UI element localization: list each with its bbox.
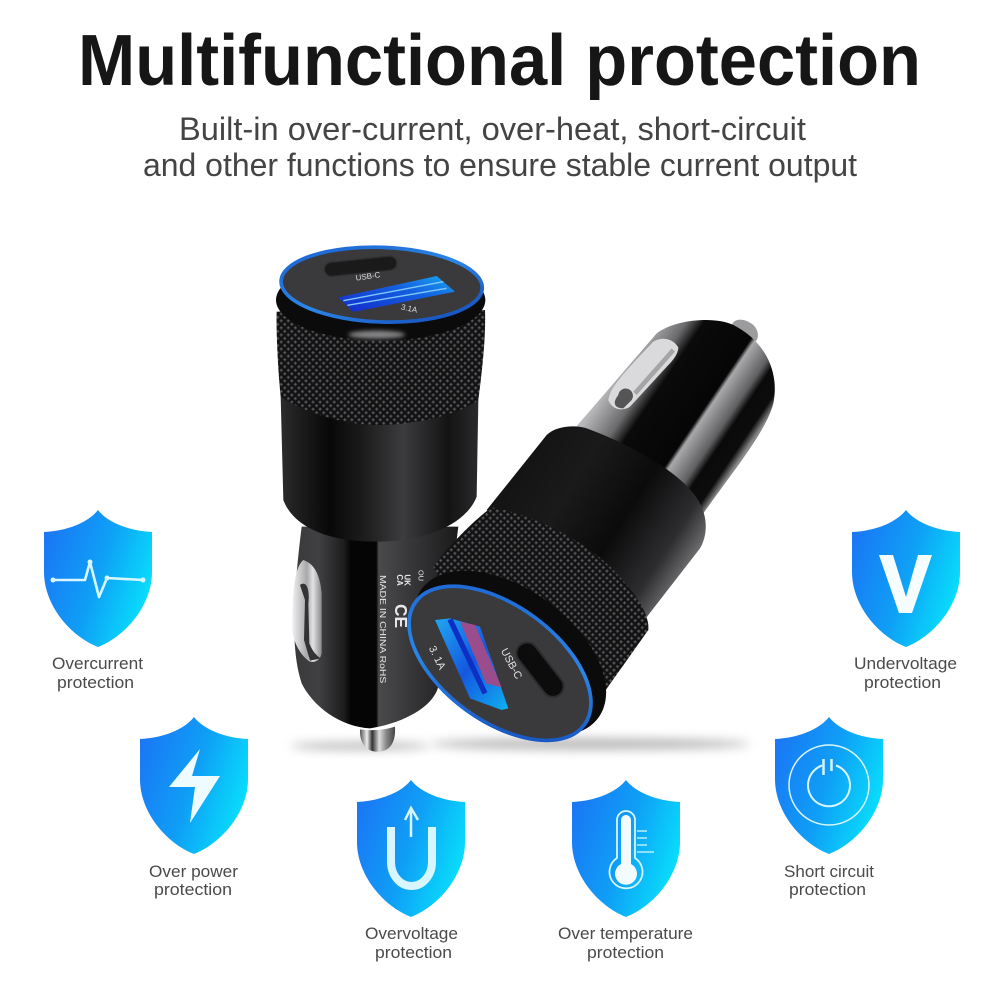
shield: undervoltage — [852, 510, 960, 647]
knurled ring — [277, 310, 485, 425]
plug markings: CA — [395, 574, 404, 586]
label: over power: Over power — [149, 862, 238, 881]
label: over power — [149, 862, 238, 899]
blue ring — [280, 244, 484, 325]
shield: over power — [140, 717, 248, 854]
USB-C port — [324, 256, 397, 277]
body sleeve — [487, 426, 706, 630]
label: over temperature — [558, 924, 693, 962]
port labels: USB-C — [498, 646, 524, 682]
blue ring — [382, 555, 618, 771]
label: short circuit: Short circuit — [784, 862, 874, 881]
power icon — [789, 745, 869, 825]
title: Multifunctional protection — [78, 21, 921, 101]
plug markings: OU — [416, 570, 425, 581]
label: short circuit — [784, 862, 874, 899]
shield: overvoltage — [357, 780, 465, 917]
tilted car charger: 3. 1A — [426, 644, 448, 672]
label: over temperature: protection — [587, 943, 664, 962]
USB-A port — [338, 276, 455, 312]
metal rim — [384, 537, 636, 769]
subtitle: and other functions to ensure stable current output — [143, 147, 857, 183]
metal side clip — [608, 339, 678, 409]
label: short circuit: protection — [789, 880, 866, 899]
metal side clip — [292, 560, 322, 662]
U arrow icon — [391, 808, 432, 886]
label: over power: protection — [154, 880, 232, 899]
label: undervoltage — [854, 654, 957, 692]
label: overvoltage — [365, 924, 458, 962]
label: overcurrent — [52, 654, 143, 692]
port labels: USB-C — [355, 270, 381, 283]
plug markings — [378, 570, 425, 684]
plug markings: CE — [391, 604, 411, 628]
label: overcurrent: Overcurrent — [52, 654, 143, 673]
plug markings: MADE IN CHINA RoHS — [378, 575, 388, 684]
label: undervoltage: Undervoltage — [854, 654, 957, 673]
body sleeve — [281, 397, 478, 542]
tilted car charger — [382, 320, 775, 771]
label: overvoltage: protection — [375, 943, 452, 962]
knurled ring — [433, 507, 648, 693]
plug body — [294, 527, 458, 728]
metal tip — [360, 727, 395, 752]
thermometer icon — [610, 811, 654, 888]
shield: overcurrent — [44, 510, 152, 647]
subtitle: Built-in over-current, over-heat, short-circuit — [179, 111, 806, 147]
plug markings: UK — [402, 574, 411, 586]
metal rim — [276, 259, 485, 341]
plug body — [573, 320, 775, 513]
upright car charger — [276, 244, 485, 752]
USB-A port — [435, 618, 508, 710]
pulse icon — [50, 560, 146, 597]
tip nub — [732, 320, 758, 342]
label: overcurrent: protection — [57, 673, 134, 692]
label: undervoltage: protection — [864, 673, 941, 692]
lightning icon — [169, 749, 220, 823]
upright car charger: 3.1A — [400, 302, 419, 315]
label: over temperature: Over temperature — [558, 924, 693, 943]
USB-C port — [512, 638, 568, 701]
shield: over temperature — [572, 780, 680, 917]
subtitle — [143, 111, 857, 183]
shield: short circuit — [775, 717, 883, 854]
V icon — [879, 555, 932, 613]
label: overvoltage: Overvoltage — [365, 924, 458, 943]
ground shadow — [290, 738, 750, 750]
